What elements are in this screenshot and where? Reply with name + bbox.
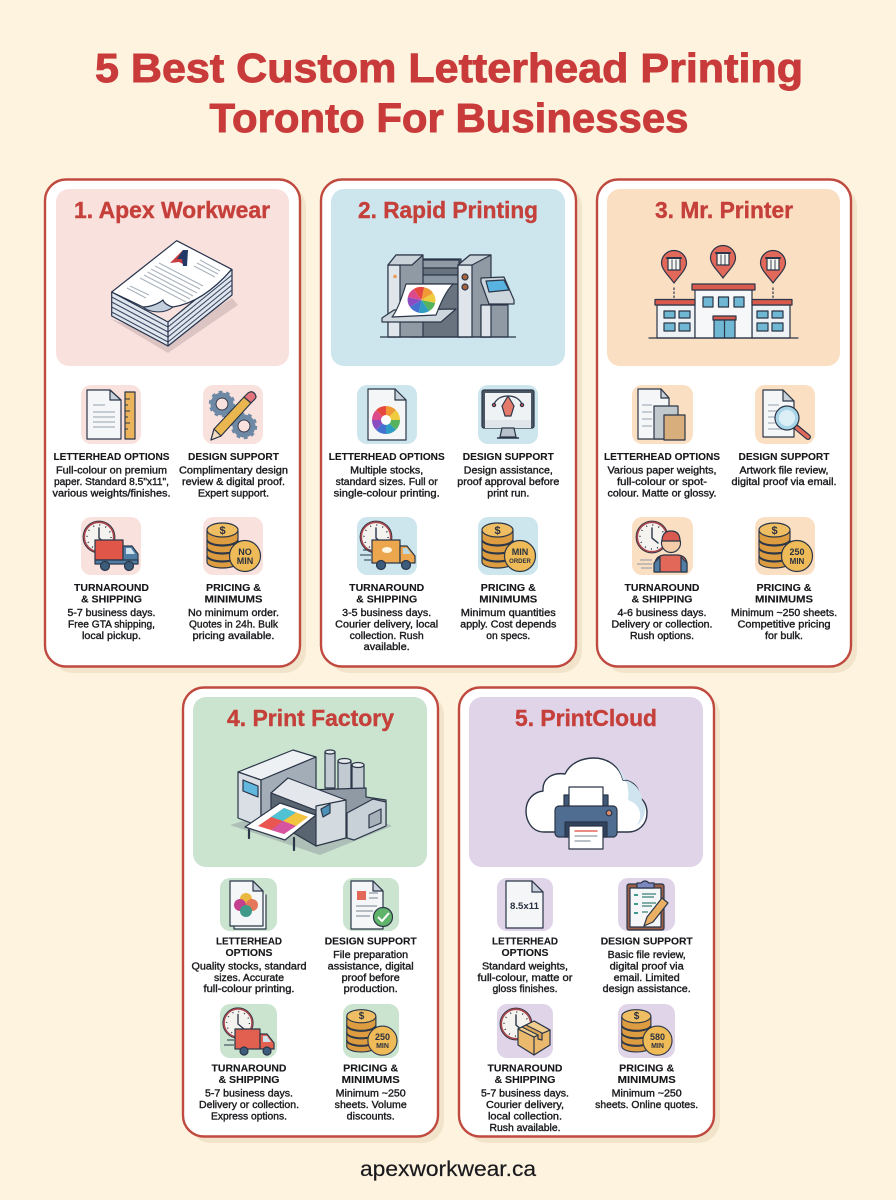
text: turnaround and shipping: & SHIPPING	[356, 594, 417, 606]
text: pricing and minimums: for bulk.	[765, 631, 803, 642]
icon: coins, 250 minimum: MIN	[376, 1043, 389, 1050]
panel: 2. Rapid Printing	[321, 180, 582, 673]
text: design support: proof approval before	[457, 477, 560, 488]
heading: Rapid Printing: 2. Rapid Printing	[358, 197, 538, 223]
icon: coins, 580 minimum: MIN	[651, 1043, 664, 1050]
icon: coins, 250 minimum: 250	[789, 547, 805, 557]
illustration: cloud printer	[526, 758, 647, 849]
icon: coins, 250 minimum: $	[359, 1011, 365, 1022]
icon: coins, no minimum: NO	[238, 547, 252, 557]
text: design support	[457, 452, 560, 500]
text: turnaround and shipping: 5-7 business days.	[481, 1088, 569, 1100]
heading: Apex Workwear: 1. Apex Workwear	[74, 197, 270, 223]
icon: document with green check	[343, 878, 399, 931]
text: letterhead options: Multiple stocks,	[350, 466, 423, 476]
text: letterhead options: gloss finishes.	[492, 984, 558, 995]
icon: coins, 250 minimum: 250	[375, 1032, 390, 1042]
text: pricing and minimums: PRICING &	[619, 1064, 675, 1074]
text: pricing and minimums	[460, 583, 556, 642]
text: letterhead options: Full-colour on premium	[56, 466, 167, 476]
icon: coins, minimum order: $	[494, 525, 501, 537]
text: design support: proof before	[342, 973, 400, 984]
text: turnaround and shipping: collection. Rush	[350, 631, 424, 642]
text: letterhead options	[52, 452, 170, 500]
illustration: printing press	[382, 255, 514, 337]
panel: 1. Apex Workwear	[45, 180, 306, 673]
text: pricing and minimums: discounts.	[347, 1112, 395, 1122]
text: pricing and minimums: No minimum order.	[188, 608, 279, 619]
title	[95, 45, 803, 141]
icon: coins, minimum order: ORDER	[509, 559, 531, 565]
text: turnaround and shipping: TURNAROUND	[624, 583, 700, 594]
icon: coins, minimum order	[478, 517, 538, 575]
heading: Print Factory: 4. Print Factory	[227, 705, 394, 731]
text: turnaround and shipping: TURNAROUND	[349, 583, 424, 594]
text: design support	[179, 452, 288, 500]
text: letterhead options: LETTERHEAD	[492, 936, 558, 948]
text: turnaround and shipping: 5-7 business days.	[205, 1088, 293, 1100]
text: turnaround and shipping	[68, 583, 156, 642]
text: pricing and minimums: Competitive pricing	[738, 620, 830, 630]
text: letterhead options: colour. Matte or glossy.	[608, 488, 716, 500]
text: design support	[732, 452, 836, 488]
text: letterhead options: LETTERHEAD OPTIONS	[54, 452, 170, 463]
text: pricing and minimums: pricing available.	[192, 631, 274, 642]
text: letterhead options: sizes. Accurate	[214, 973, 284, 984]
text: turnaround and shipping: Delivery or collection.	[199, 1100, 299, 1111]
text: turnaround and shipping	[199, 1064, 299, 1122]
icon: coins, no minimum: MIN	[237, 556, 253, 566]
text: pricing and minimums: Minimum quantities	[461, 608, 556, 619]
text: turnaround and shipping: TURNAROUND	[212, 1064, 286, 1074]
text: pricing and minimums: Quotes in 24h. Bulk	[189, 620, 279, 630]
icon: coins, 250 minimum	[755, 517, 815, 575]
text: letterhead options: full-colour printing.	[204, 984, 294, 995]
text: pricing and minimums	[335, 1064, 407, 1122]
text: turnaround and shipping: local collection.	[488, 1112, 562, 1122]
panel: 3. Mr. Printer	[597, 180, 857, 673]
text: letterhead options: LETTERHEAD OPTIONS	[604, 452, 720, 463]
icon: clock and truck	[81, 517, 141, 575]
icon: clock and orange truck	[357, 517, 417, 575]
text: pricing and minimums	[188, 583, 279, 642]
text: letterhead options: OPTIONS	[226, 948, 273, 959]
text: design support	[601, 936, 693, 995]
icon: gears and pencil	[203, 385, 263, 444]
text: design support: review & digital proof.	[182, 477, 285, 488]
text: design support: Expert support.	[198, 488, 269, 500]
heading: Mr. Printer: 3. Mr. Printer	[655, 197, 793, 223]
ground line: printing press	[380, 336, 516, 338]
text: pricing and minimums	[731, 583, 837, 642]
text: pricing and minimums: MINIMUMS	[342, 1075, 400, 1086]
icon: document and magnifier	[755, 385, 815, 444]
text: pricing and minimums: Minimum ~250 sheets.	[731, 608, 837, 619]
text: turnaround and shipping: local pickup.	[82, 631, 141, 642]
text: turnaround and shipping: Courier delivery,	[486, 1100, 564, 1111]
icon: paper stock samples	[632, 385, 693, 444]
text: pricing and minimums: PRICING &	[206, 583, 262, 594]
text: turnaround and shipping: Rush options.	[630, 631, 694, 642]
text: turnaround and shipping: Delivery or collection.	[612, 620, 712, 630]
text: turnaround and shipping: 3-5 business days.	[342, 608, 431, 619]
text: design support: DESIGN SUPPORT	[325, 936, 417, 948]
icon: coins, no minimum	[203, 517, 263, 575]
illustration: letterhead stack	[109, 241, 238, 353]
title: Toronto For Businesses	[210, 95, 688, 141]
text: letterhead options: Quality stocks, standard	[192, 962, 306, 972]
text: pricing and minimums: MINIMUMS	[755, 594, 813, 606]
icon: clock and red truck	[220, 1004, 277, 1058]
text: letterhead options: LETTERHEAD	[216, 936, 282, 948]
text: design support: Basic file review,	[608, 950, 686, 961]
text: design support: digital proof via	[610, 962, 684, 972]
text: letterhead options: paper. Standard 8.5"x11",	[54, 477, 169, 488]
icon: coins, 250 minimum	[343, 1004, 399, 1058]
icon: clock and parcel	[497, 1004, 553, 1058]
text: design support: assistance, digital	[328, 962, 414, 972]
text: letterhead options: standard sizes. Full or	[336, 477, 438, 488]
text: letterhead options: OPTIONS	[502, 948, 549, 959]
icon: monitor with pen tool	[478, 385, 538, 444]
text: pricing and minimums: PRICING &	[343, 1064, 399, 1074]
icon: coins, 250 minimum: $	[771, 525, 778, 537]
icon: letterhead document and ruler	[81, 385, 141, 444]
icon: coins, no minimum: $	[219, 525, 226, 537]
text: letterhead options: various weights/finishes.	[52, 488, 170, 500]
text: turnaround and shipping: & SHIPPING	[218, 1075, 280, 1086]
text: letterhead options: single-colour printing.	[334, 488, 440, 500]
text: design support: design assistance.	[603, 984, 691, 995]
text: pricing and minimums: PRICING &	[481, 583, 536, 594]
text: turnaround and shipping: & SHIPPING	[632, 594, 692, 606]
text: letterhead options	[478, 936, 573, 995]
text: pricing and minimums	[595, 1064, 698, 1111]
icon: document sized 8.5x11: 8.5x11	[510, 901, 540, 912]
text: design support: Artwork file review,	[740, 466, 828, 476]
icon: coins, 580 minimum: $	[634, 1011, 640, 1022]
text: design support: DESIGN SUPPORT	[463, 452, 554, 463]
text: design support: Complimentary design	[179, 466, 288, 476]
text: turnaround and shipping: 5-7 business days.	[68, 608, 156, 619]
text: letterhead options: Various paper weights,	[608, 466, 716, 476]
illustration: industrial printer	[230, 750, 392, 855]
text: turnaround and shipping	[335, 583, 438, 653]
icon: document sized 8.5x11	[497, 878, 553, 931]
text: pricing and minimums: MINIMUMS	[204, 594, 263, 606]
text: turnaround and shipping: Courier delivery, local	[335, 620, 438, 630]
text: turnaround and shipping: Free GTA shipping,	[68, 620, 155, 630]
text: design support: DESIGN SUPPORT	[738, 452, 830, 463]
text: letterhead options: full-colour or spot-	[617, 477, 707, 488]
text: design support: production.	[344, 984, 398, 995]
text: letterhead options: Standard weights,	[482, 962, 568, 972]
text: letterhead options: LETTERHEAD OPTIONS	[329, 452, 445, 463]
text: design support: DESIGN SUPPORT	[601, 936, 693, 948]
icon: coins, 580 minimum: 580	[650, 1032, 665, 1042]
icon: coins, 580 minimum	[618, 1004, 675, 1058]
text: pricing and minimums: apply. Cost depends	[460, 620, 556, 630]
panel: 4. Print Factory	[183, 688, 444, 1143]
illustration: storefront with location pins	[649, 246, 798, 338]
text: turnaround and shipping: available.	[364, 642, 410, 653]
text: design support: digital proof via email.	[732, 477, 836, 488]
text: turnaround and shipping: TURNAROUND	[488, 1064, 562, 1074]
text: turnaround and shipping	[481, 1064, 569, 1134]
text: turnaround and shipping: & SHIPPING	[81, 594, 142, 606]
text: letterhead options	[329, 452, 445, 500]
text: turnaround and shipping: TURNAROUND	[74, 583, 149, 594]
icon: coins, 250 minimum: MIN	[790, 557, 805, 566]
icon: document with colour petals	[220, 878, 277, 931]
text: turnaround and shipping: Rush available.	[490, 1123, 560, 1134]
text: design support: print run.	[487, 488, 529, 500]
text: turnaround and shipping: 4-6 business days.	[618, 608, 706, 619]
text: pricing and minimums: sheets. Volume	[335, 1100, 407, 1111]
heading: PrintCloud: 5. PrintCloud	[515, 705, 657, 731]
text: design support: email. Limited	[614, 973, 680, 984]
text: pricing and minimums: PRICING &	[756, 583, 812, 594]
text: pricing and minimums: Minimum ~250	[336, 1088, 406, 1100]
text: pricing and minimums: MINIMUMS	[479, 594, 537, 606]
text: letterhead options: full-colour, matte or	[478, 973, 573, 984]
text: pricing and minimums: on specs.	[486, 631, 530, 642]
text: pricing and minimums: sheets. Online quotes.	[595, 1100, 698, 1111]
icon: clipboard and pencil	[618, 878, 675, 931]
panel: 5. PrintCloud	[459, 688, 720, 1143]
footer: website: apexworkwear.ca	[360, 1158, 536, 1181]
text: design support: File preparation	[333, 950, 408, 961]
icon: clock and courier	[632, 517, 693, 575]
title: 5 Best Custom Letterhead Printing	[95, 45, 803, 91]
text: design support: Design assistance,	[464, 466, 553, 476]
text: pricing and minimums: MINIMUMS	[618, 1075, 676, 1086]
text: design support: DESIGN SUPPORT	[188, 452, 280, 463]
text: pricing and minimums: Minimum ~250	[612, 1088, 682, 1100]
text: turnaround and shipping: Express options.	[211, 1112, 287, 1122]
text: letterhead options	[604, 452, 720, 500]
text: turnaround and shipping: & SHIPPING	[494, 1075, 556, 1086]
text: design support	[325, 936, 417, 995]
icon: document with colour wheel	[357, 385, 417, 444]
text: letterhead options	[192, 936, 306, 995]
icon: coins, minimum order: MIN	[512, 547, 528, 557]
text: turnaround and shipping	[612, 583, 712, 642]
